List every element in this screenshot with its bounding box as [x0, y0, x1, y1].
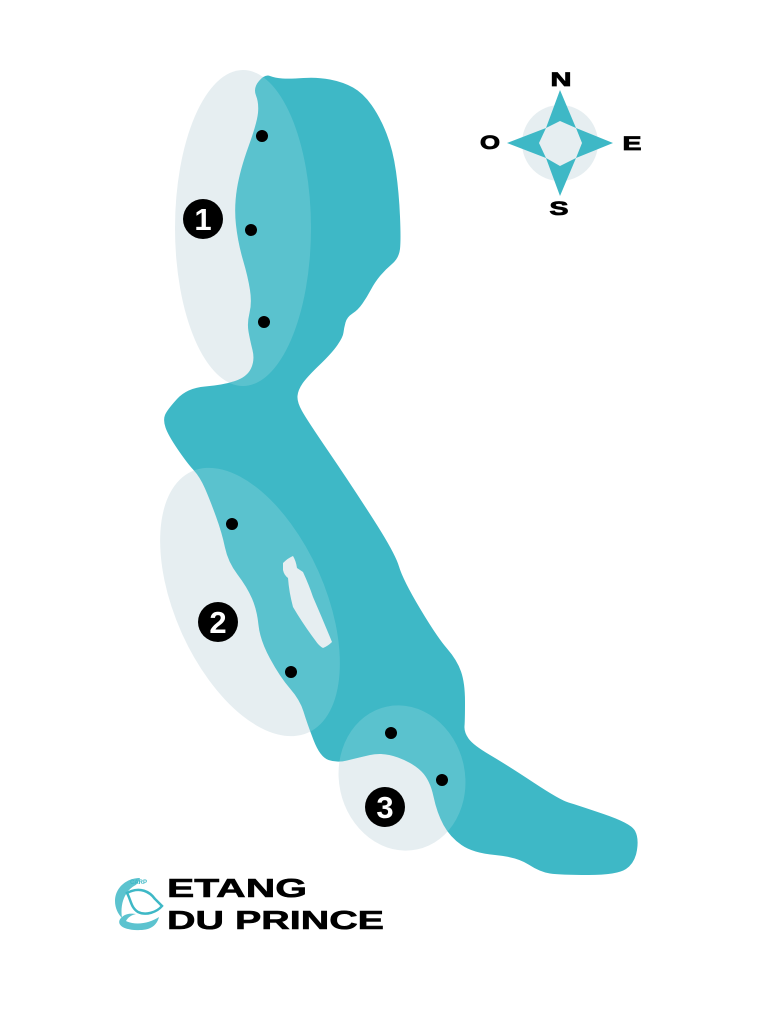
compass rose — [480, 70, 642, 220]
compass letters: O — [480, 133, 500, 154]
logo title: ETANG — [167, 873, 307, 903]
zone number 2: 2 — [209, 605, 227, 640]
logo: fish emblem — [115, 878, 162, 930]
fishing spots — [226, 130, 448, 786]
compass letters — [480, 70, 642, 220]
compass letters: N — [550, 70, 572, 91]
zone number 3: 3 — [376, 790, 394, 825]
compass letters: S — [550, 199, 568, 220]
logo small wording: CARP — [130, 880, 147, 886]
logo title — [167, 873, 384, 935]
zone overlays on the water — [123, 70, 479, 863]
zone number 3 — [365, 787, 405, 827]
island — [283, 556, 332, 648]
zone ellipses, land side — [123, 70, 479, 863]
zone number 1 — [183, 199, 223, 239]
zone number 2 — [198, 602, 238, 642]
zone number 1: 1 — [194, 202, 212, 237]
map infographic — [115, 70, 641, 930]
logo title: DU PRINCE — [167, 905, 384, 935]
compass letters: E — [622, 134, 642, 155]
lake — [164, 76, 638, 875]
